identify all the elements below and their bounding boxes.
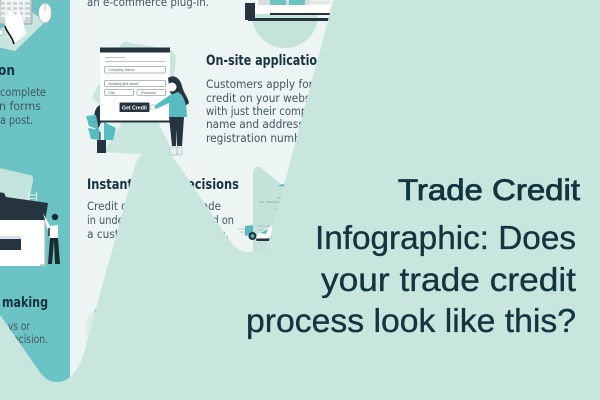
text: on-site application body — [206, 79, 312, 144]
text: left decision body — [8, 324, 48, 343]
text: on-site application body: registration number. — [206, 131, 314, 145]
faint blob and leaf — [86, 306, 96, 338]
panel: teal column — [0, 0, 70, 400]
illustration: mint triangle with delivery truck — [237, 166, 284, 252]
title: infographic question: your trade credit — [321, 261, 576, 298]
browser window — [100, 48, 170, 122]
button: get credit: Get Credit — [122, 105, 147, 111]
illustration: credit application form — [86, 42, 189, 156]
illustration: credit application form: Postcode — [141, 91, 156, 95]
text: left decision body: ys or — [8, 319, 30, 333]
text: left decision body: ecision. — [13, 332, 48, 346]
text: on-site application body: credit on your website — [206, 91, 324, 105]
form fields — [104, 66, 166, 96]
icon: keyboard and hand — [0, 0, 60, 51]
text: instant decisions body — [88, 201, 234, 238]
illustration: credit application form: Company Name — [108, 68, 134, 72]
icon: potted plant — [86, 105, 116, 153]
title: infographic question: process look like this? — [246, 302, 576, 339]
woman pointing — [150, 76, 189, 155]
illustration: credit application form: City — [108, 91, 115, 95]
title: infographic question — [246, 219, 576, 339]
text: left decision heading: making — [2, 295, 48, 311]
infographic excerpt clipped by shape — [0, 0, 340, 400]
panel: light background — [0, 0, 340, 400]
text: on-site application body: with just their company — [206, 104, 326, 118]
text: left application body — [0, 85, 46, 127]
text: left application body: a post. — [0, 113, 33, 127]
text: left application body: n forms — [0, 99, 41, 113]
title: infographic question: Infographic: Does — [315, 219, 576, 256]
text: left application body: complete — [0, 85, 46, 99]
icon: laptop with man — [0, 167, 60, 266]
text: instant decisions body: a customer's credit profile. — [87, 227, 229, 241]
text: instant decisions body: Credit decisions are made — [87, 199, 221, 213]
illustration: credit application form: Building and street — [108, 82, 138, 86]
text: on-site application body: Customers apply for — [206, 77, 313, 91]
text: instant credit decisions heading: Instant credit decisions — [87, 177, 239, 193]
heading: trade credit: Trade Credit — [398, 174, 581, 207]
text: instant decisions body: in under 60 seconds based on — [87, 213, 234, 227]
text: on-site application body: name and address or — [206, 117, 318, 131]
text: on-site application heading: On-site application — [206, 53, 325, 69]
icon: storefront laptop — [245, 0, 332, 48]
